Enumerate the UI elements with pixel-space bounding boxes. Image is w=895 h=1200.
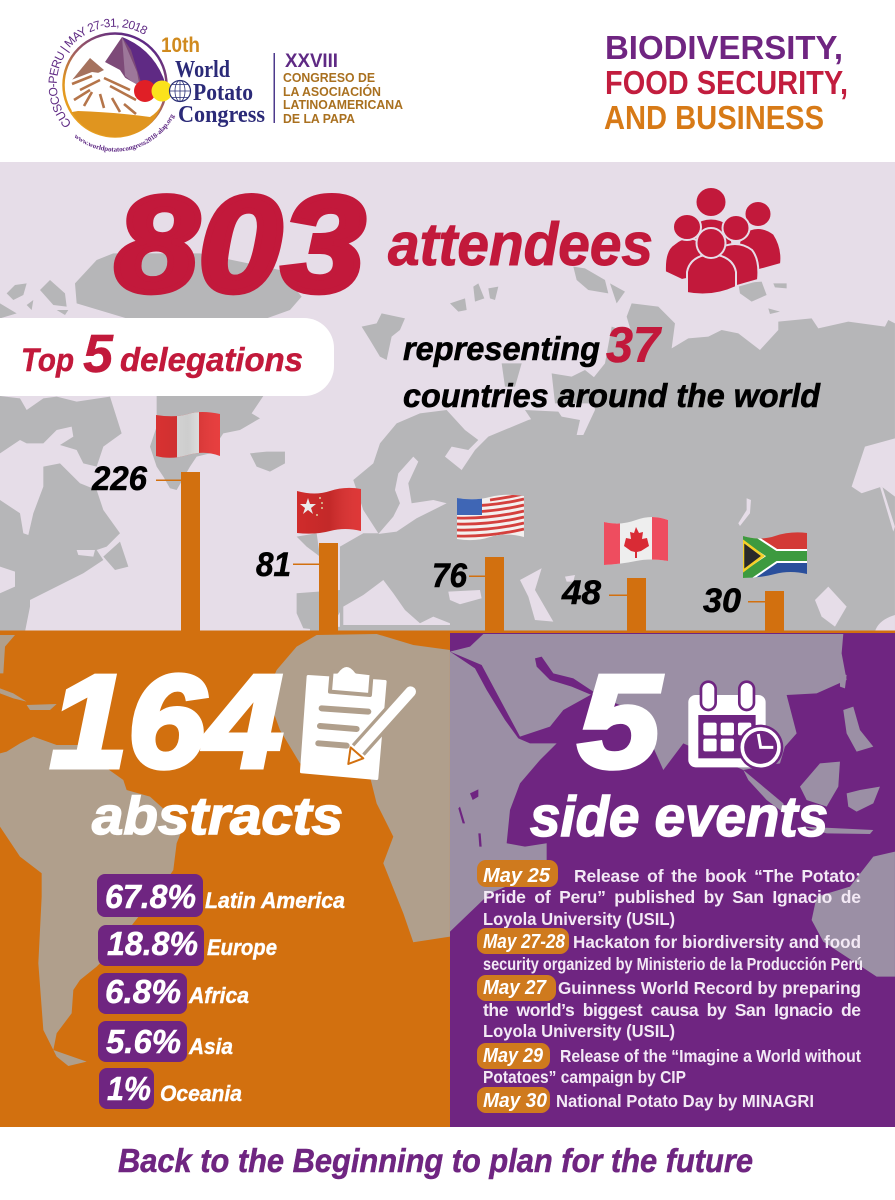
event: May 27: Loyola University (USIL) — [483, 1021, 675, 1041]
region: Asia share: Asia — [188, 1034, 233, 1059]
event: May 30: National Potato Day by MINAGRI — [556, 1091, 814, 1111]
delegation bar chart — [0, 460, 895, 633]
region: Europe share: Europe — [207, 935, 277, 960]
map: gulf and lake details — [458, 657, 593, 847]
logo spanish congress name: LATINOAMERICANA — [283, 97, 404, 112]
panel: abstracts — [0, 633, 450, 1127]
countries represented text: 37 — [606, 317, 662, 373]
icon: group of people — [665, 187, 781, 295]
side events label: side events — [530, 785, 828, 849]
bar: Canada 48: 48 — [561, 574, 601, 612]
map water cut-outs: Asia — [520, 487, 895, 632]
bar: China 81: 81 — [256, 546, 291, 584]
event: May 29: Potatoes” campaign by CIP — [483, 1067, 686, 1087]
bar: USA 76: 76 — [432, 557, 468, 595]
world map background: Americas, Greenland, Europe — [0, 253, 478, 632]
region: Asia share: 5.6% — [106, 1023, 181, 1060]
region: Oceania share: Oceania — [160, 1081, 242, 1106]
bar: Peru 226 — [91, 460, 200, 632]
total attendees number: 803 — [115, 168, 365, 320]
logo wordmark: Potato — [193, 80, 253, 106]
icon: flag of Canada — [604, 517, 668, 565]
icon: clipboard and pencil — [302, 665, 411, 778]
region: Latin America share — [97, 874, 345, 917]
event: May 27: the world’s biggest causa by San Ignacio de — [483, 1000, 861, 1020]
map: South America and Africa — [0, 634, 450, 1066]
logo spanish congress name: XXVIII — [285, 51, 338, 72]
region: Europe share — [98, 925, 277, 966]
side events number: 5 — [578, 648, 662, 795]
countries represented text — [403, 317, 821, 414]
event: May 29 — [477, 1043, 861, 1087]
logo wordmark — [161, 34, 265, 128]
logo spanish congress name: CONGRESO DE — [283, 70, 375, 85]
logo arc text: dates and place: CUSCO-PERU | MAY 27-31, 2018 — [48, 18, 148, 127]
footer slogan: Back to the Beginning to plan for the future — [118, 1142, 753, 1179]
region: Africa share: Africa — [188, 983, 249, 1008]
abstracts label: abstracts — [92, 787, 343, 846]
bar: South Africa 30 — [703, 582, 784, 632]
panel: side events — [450, 633, 895, 1127]
icon: flag of USA — [457, 494, 524, 540]
event: May 30 — [477, 1087, 814, 1113]
event: May 25: Release of the book “The Potato: — [574, 866, 861, 886]
region: Oceania share — [99, 1068, 242, 1109]
region: Europe share: 18.8% — [107, 925, 198, 962]
event: May 27 — [477, 975, 861, 1041]
bar: South Africa 30: 30 — [703, 582, 741, 620]
bar: China 81 — [256, 543, 338, 632]
map water cut-outs — [0, 457, 482, 625]
event: May 29: Release of the “Imagine a World without — [560, 1046, 861, 1066]
region: Asia share — [98, 1021, 233, 1062]
icon: flag of China — [297, 488, 361, 534]
countries represented text: representing — [403, 330, 600, 367]
event: May 27-28: May 27-28 — [483, 931, 566, 953]
congress theme heading: BIODIVERSITY, — [605, 29, 843, 66]
congress logo — [48, 18, 404, 152]
icon: calendar with clock — [688, 682, 783, 770]
top 5 delegations pill — [0, 318, 334, 396]
logo arc text: website: www.worldpotatocongress2018-alap.org — [75, 114, 176, 152]
region: Africa share: 6.8% — [105, 973, 181, 1010]
congress theme heading: AND BUSINESS — [604, 99, 824, 136]
event: May 30: May 30 — [483, 1090, 547, 1112]
logo circles and globe — [134, 80, 190, 102]
region: Africa share — [98, 973, 249, 1014]
region: Oceania share: 1% — [107, 1070, 151, 1107]
event: May 25 — [477, 860, 861, 929]
event: May 27-28 — [477, 928, 863, 974]
event: May 25: May 25 — [483, 865, 551, 887]
event: May 29: May 29 — [483, 1045, 544, 1067]
top 5 delegations pill: 5 — [83, 324, 114, 384]
bar: Canada 48 — [561, 574, 646, 632]
congress theme heading — [604, 29, 848, 136]
top 5 delegations pill: delegations — [120, 341, 303, 378]
region: Latin America share: Latin America — [205, 888, 345, 913]
bar: USA 76 — [432, 557, 504, 632]
attendees label: attendees — [388, 211, 653, 278]
top 5 delegations pill: Top — [21, 342, 74, 378]
logo wordmark: Congress — [178, 102, 265, 128]
logo wordmark: 10th — [161, 34, 200, 57]
region: Latin America share: 67.8% — [105, 878, 196, 915]
world map background: Eurasia — [445, 267, 895, 632]
bar: Peru 226: 226 — [91, 460, 148, 498]
event: May 27: Guinness World Record by preparing — [558, 978, 861, 998]
logo spanish congress name: DE LA PAPA — [283, 111, 356, 126]
logo emblem: Machu Picchu circle — [64, 34, 166, 137]
logo wordmark: World — [175, 57, 231, 83]
icon: flag of South Africa — [743, 530, 807, 581]
icon: flag of Peru — [156, 412, 220, 458]
event: May 25: Pride of Peru” published by San Ignacio de — [483, 887, 861, 907]
logo spanish congress name — [283, 51, 404, 126]
congress theme heading: FOOD SECURITY, — [605, 64, 848, 101]
event: May 27: May 27 — [483, 977, 547, 999]
logo spanish congress name: LA ASOCIACIÓN — [283, 84, 381, 99]
panel: attendance and delegations — [0, 162, 895, 633]
abstracts number: 164 — [50, 648, 283, 795]
event: May 27-28: Hackaton for biordiversity and food — [573, 932, 861, 952]
map: Indian Ocean region — [450, 634, 895, 977]
countries represented text: countries around the world — [403, 377, 821, 414]
event: May 25: Loyola University (USIL) — [483, 909, 675, 929]
